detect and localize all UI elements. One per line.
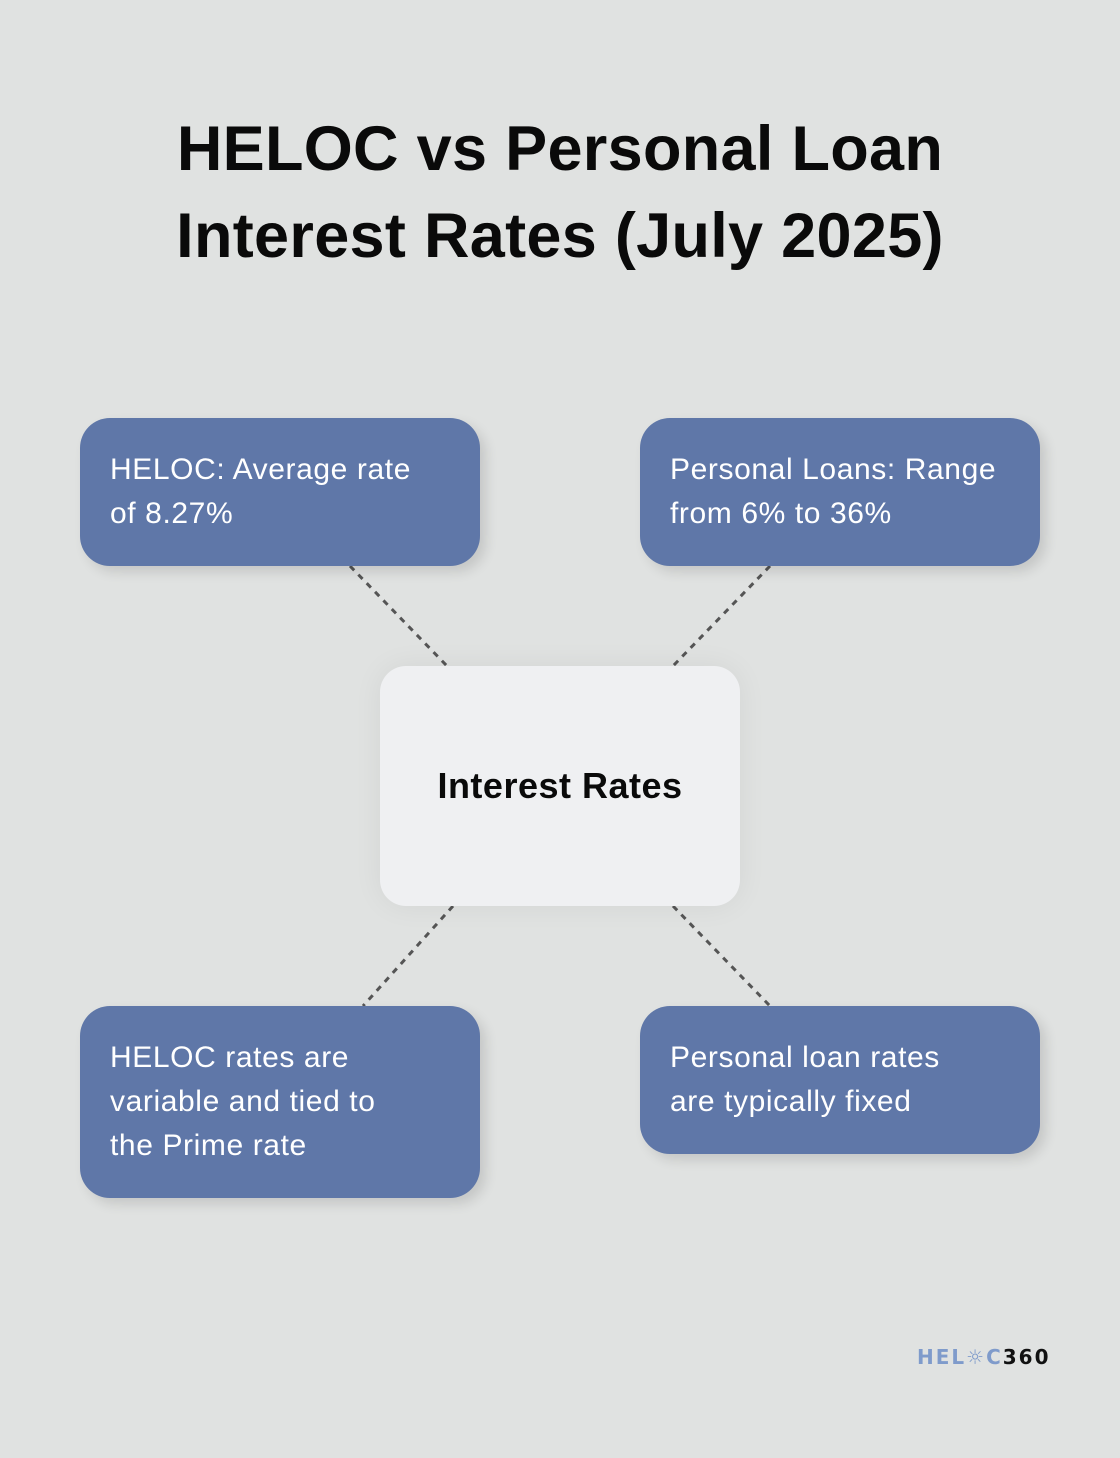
box: personal loan fixed: are typically fixed	[670, 1085, 912, 1118]
center box: Interest Rates	[380, 666, 740, 906]
box: personal loan range	[640, 418, 1040, 566]
box: personal loan fixed	[640, 1006, 1040, 1154]
title: Interest Rates (July 2025)	[176, 201, 944, 271]
box: personal loan fixed: Personal loan rates	[670, 1041, 940, 1074]
box: HELOC variable: the Prime rate	[110, 1129, 307, 1162]
title	[176, 114, 944, 271]
box: HELOC average rate: of 8.27%	[110, 497, 233, 530]
center box: Interest Rates: Interest Rates	[437, 765, 683, 806]
box: HELOC variable: variable and tied to	[110, 1085, 376, 1118]
box: HELOC average rate: HELOC: Average rate	[110, 453, 411, 486]
box: HELOC variable	[80, 1006, 480, 1198]
box: personal loan range: Personal Loans: Range	[670, 453, 996, 486]
box: personal loan range: from 6% to 36%	[670, 497, 892, 530]
box: HELOC average rate	[80, 418, 480, 566]
logo: HEL☼C360	[917, 1345, 1051, 1369]
title: HELOC vs Personal Loan	[177, 114, 943, 184]
box: HELOC variable: HELOC rates are	[110, 1041, 349, 1074]
